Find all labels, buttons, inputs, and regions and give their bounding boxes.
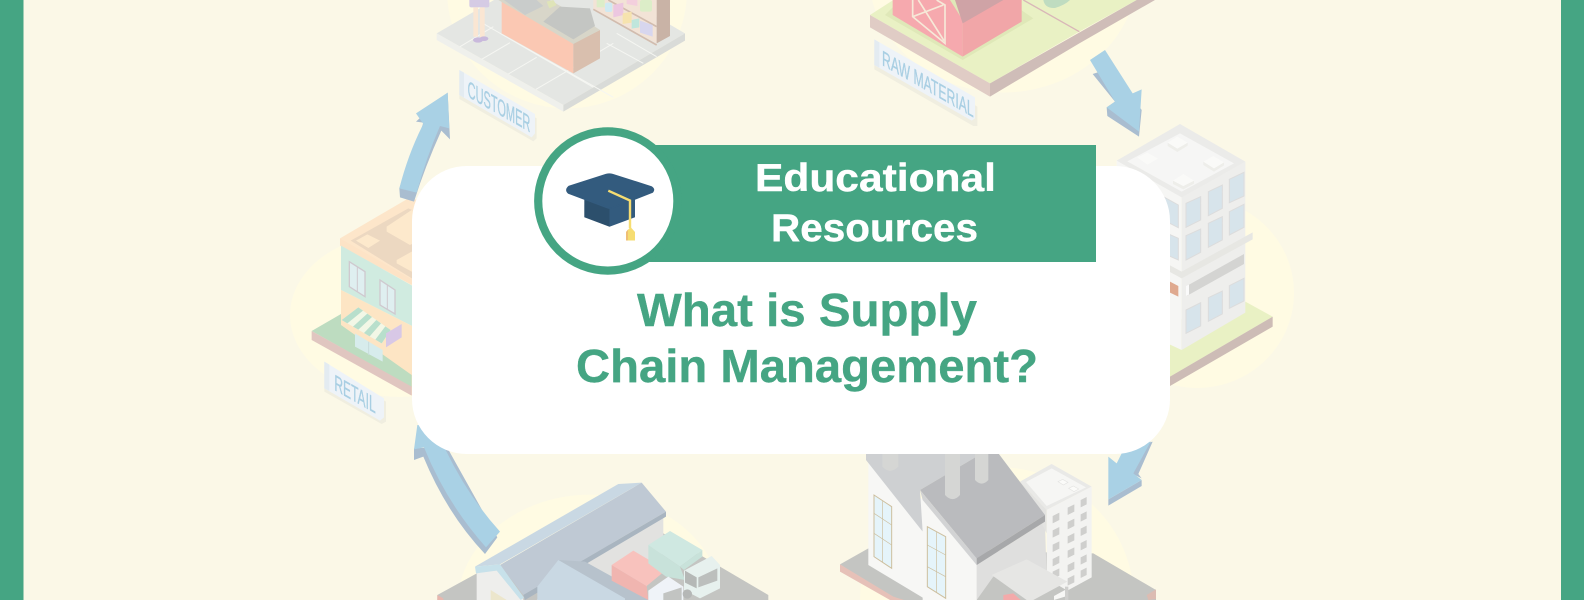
arrow: raw material to manufacturer <box>1090 50 1142 137</box>
right border bar <box>1561 0 1584 600</box>
label: customer: CUSTOMER <box>468 76 530 138</box>
scene: factory <box>840 447 1156 600</box>
label: customer <box>459 70 537 141</box>
panel: central white card <box>412 166 1170 454</box>
label: retail: RETAIL <box>334 371 376 419</box>
label: raw material: RAW MATERIAL <box>882 46 974 122</box>
scene: customer shop <box>437 0 687 112</box>
arrow: retail to customer <box>399 93 450 202</box>
banner heading line two: Resources <box>771 207 978 250</box>
icon: graduation cap badge <box>538 131 677 271</box>
heading: what is supply chain management <box>576 284 1038 392</box>
scene: office building <box>1100 124 1294 388</box>
scene: warehouse <box>437 483 768 600</box>
banner heading line one: Educational <box>755 157 996 200</box>
left border bar <box>0 0 24 600</box>
arrow: warehouse to retail <box>414 425 500 554</box>
scene: retail store <box>290 198 510 400</box>
banner: educational resources <box>607 145 1096 262</box>
arrow: manufacturer to warehouse <box>1108 442 1153 506</box>
scene: raw material farm <box>870 0 1155 97</box>
heading: what is supply chain management: What is Supply <box>637 284 977 336</box>
label: retail <box>324 362 386 424</box>
label: raw material <box>874 39 977 126</box>
heading: what is supply chain management: Chain Management? <box>576 340 1038 392</box>
